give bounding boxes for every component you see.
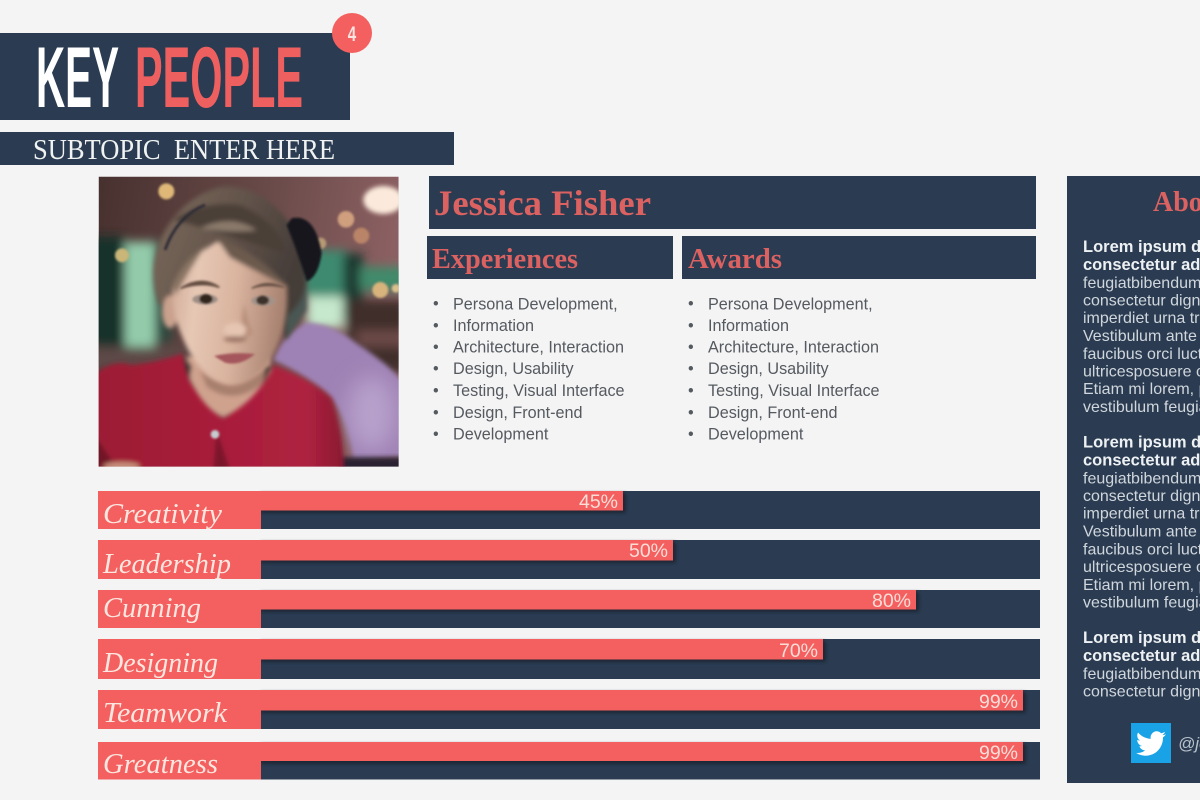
heading: experiences: Experiences [432, 244, 578, 275]
list: awards: Testing, Visual Interface [708, 382, 880, 400]
bar: greatness 99%: Greatness [103, 748, 218, 780]
list: experiences: Development [453, 426, 549, 444]
name banner: Jessica Fisher: Jessica Fisher [434, 183, 651, 223]
list: awards: Information [708, 317, 789, 335]
list: awards: • [688, 317, 694, 335]
heading: awards: Awards [688, 244, 782, 275]
bar: teamwork 99%: Teamwork [103, 697, 228, 729]
list: awards: • [688, 382, 694, 400]
list: awards: Development [708, 426, 804, 444]
hair and hair flower [153, 187, 307, 340]
text block: paragraph 3 [1083, 629, 1200, 700]
bar: cunning 80%: Cunning [103, 592, 201, 624]
list: experiences: Design, Usability [453, 360, 574, 378]
header: key people title bar: PEOPLE [135, 30, 303, 126]
bar: teamwork 99%: 99% [979, 691, 1018, 713]
icon: twitter [1131, 723, 1171, 763]
list: experiences: Information [453, 317, 534, 335]
list: experiences: • [433, 295, 439, 313]
bar: leadership 50%: 50% [629, 540, 668, 562]
face [162, 238, 290, 385]
bar: designing 70%: 70% [779, 640, 818, 662]
list: experiences [433, 295, 625, 444]
subtopic bar: SUBTOPIC ENTER HERE [33, 135, 335, 166]
red cardigan [93, 353, 344, 470]
list: awards: • [688, 360, 694, 378]
list: experiences: Testing, Visual Interface [453, 382, 625, 400]
list: awards: • [688, 404, 694, 422]
list: awards [688, 295, 880, 444]
title: KEY PEOPLE [36, 30, 303, 126]
bar: creativity 45%: 45% [579, 491, 618, 513]
bar: cunning 80% [98, 590, 1040, 628]
heading: awards [682, 236, 1036, 279]
panel: awards [682, 236, 1036, 444]
bar: leadership 50%: Leadership [102, 548, 231, 580]
list: experiences: • [433, 404, 439, 422]
list: experiences: • [433, 338, 439, 356]
list: awards: Persona Development, [708, 296, 873, 314]
list: experiences: • [433, 360, 439, 378]
list: awards: • [688, 426, 694, 444]
heading: experiences [427, 236, 673, 279]
bar: teamwork 99% [98, 690, 1040, 729]
neck [184, 347, 273, 417]
bar: creativity 45% [98, 491, 1040, 530]
list: awards: Design, Usability [708, 360, 829, 378]
name banner: Jessica Fisher [429, 176, 1036, 229]
title: KEY PEOPLE: KEY [36, 30, 119, 126]
text block: paragraph 2 [1083, 434, 1200, 612]
bar: cunning 80%: 80% [872, 590, 911, 612]
chart: skill bars [98, 491, 1040, 780]
list: experiences: • [433, 317, 439, 335]
panel: experiences [427, 236, 673, 444]
bar: greatness 99% [98, 742, 1040, 780]
bar: creativity 45%: Creativity [103, 498, 222, 530]
badge: number 4: 4 [348, 21, 357, 46]
badge: number 4 [332, 13, 372, 53]
list: experiences: • [433, 426, 439, 444]
list: awards: • [688, 295, 694, 313]
text block: paragraph 1 [1083, 238, 1200, 416]
photo: portrait of a girl [90, 177, 407, 471]
bar: designing 70% [98, 639, 1040, 679]
list: experiences: Persona Development, [453, 296, 618, 314]
panel: about sidebar [1067, 176, 1200, 783]
list: awards: Design, Front-end [708, 404, 838, 422]
bar: greatness 99%: 99% [979, 742, 1018, 764]
bar: leadership 50% [98, 540, 1040, 580]
header: key people title bar [0, 30, 350, 126]
list: awards: • [688, 338, 694, 356]
list: experiences: Architecture, Interaction [453, 338, 624, 356]
bar: designing 70%: Designing [102, 647, 218, 679]
list: experiences: • [433, 382, 439, 400]
list: awards: Architecture, Interaction [708, 338, 879, 356]
subtopic bar [0, 132, 454, 166]
purple cushion [273, 323, 403, 460]
list: experiences: Design, Front-end [453, 404, 583, 422]
